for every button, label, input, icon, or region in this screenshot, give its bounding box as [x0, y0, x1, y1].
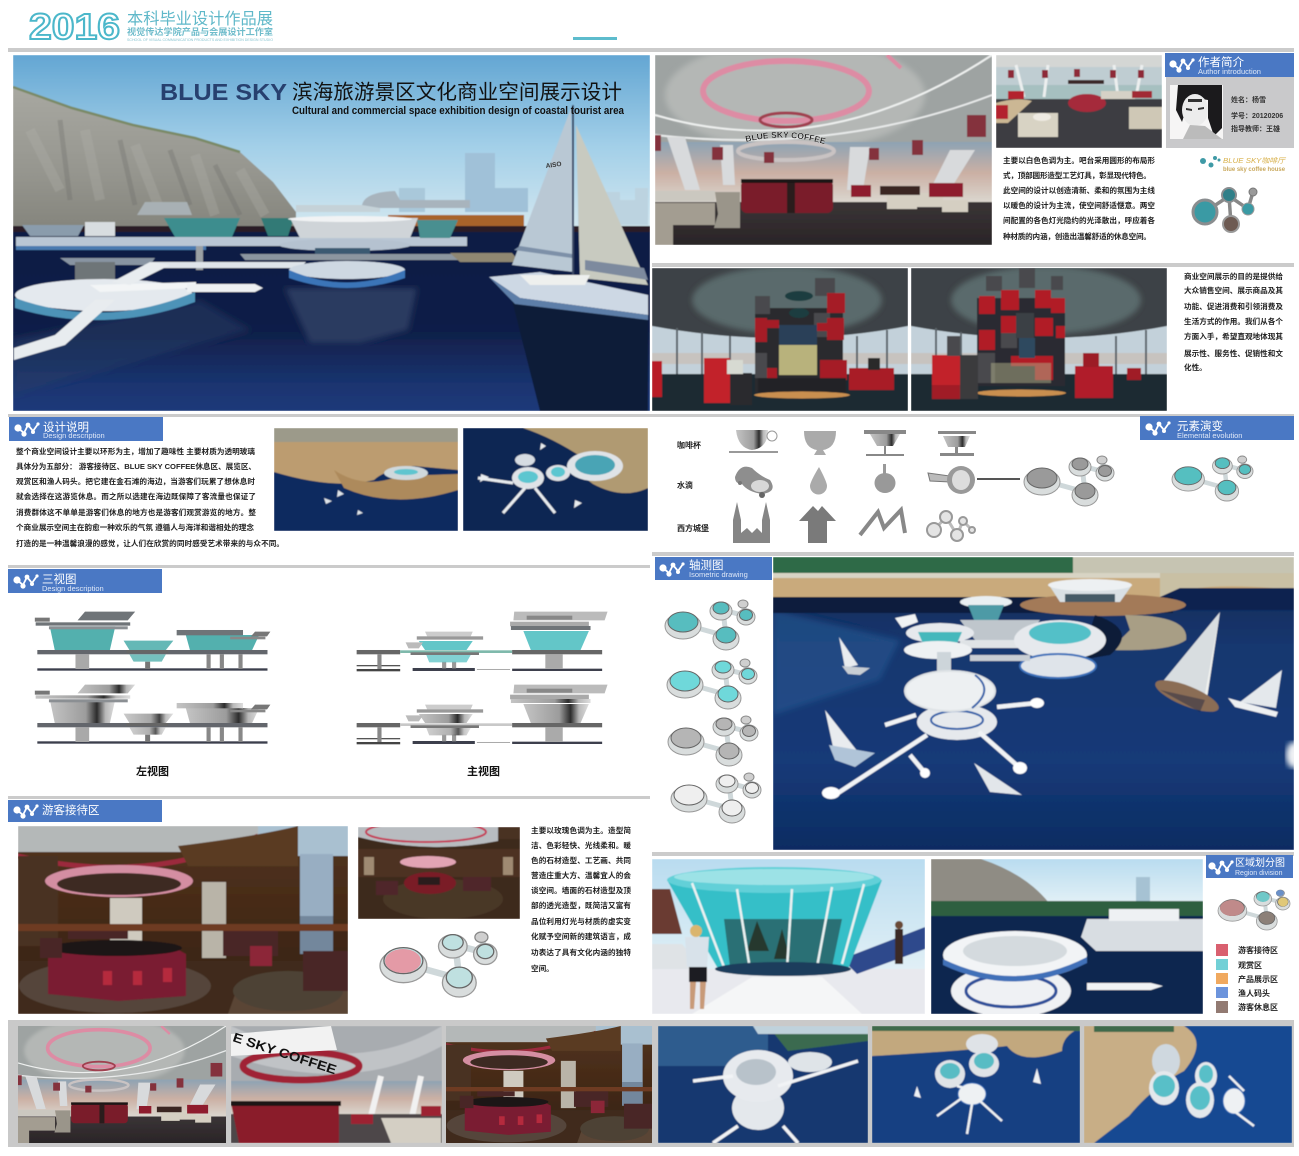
text: reception description: 部的透光造型，既简洁又富有	[531, 900, 631, 910]
icon: castle	[733, 502, 770, 543]
render: cafe bar close-up	[231, 1026, 442, 1143]
main title: BLUE SKY	[160, 79, 287, 105]
heading: elemental evolution: 元素演变	[1177, 419, 1223, 433]
panel: exhibition render left	[652, 268, 908, 411]
panel: region division	[1206, 855, 1293, 1013]
text: cafe description	[1003, 155, 1155, 241]
panel: region render dome	[652, 859, 925, 1014]
heading: elemental evolution: Elemental evolution	[1177, 431, 1242, 440]
icon: rings	[927, 511, 975, 541]
panel: author introduction: 学号：20120206	[1231, 111, 1283, 120]
heading: author introduction: 作者简介	[1198, 55, 1244, 69]
icon: zigzag	[860, 510, 905, 535]
render: aerial one	[658, 1026, 868, 1143]
text: reception description: 化赋予空间新的建筑语言，成	[531, 931, 631, 941]
heading: visitor reception	[8, 800, 162, 822]
model: grey evolution	[1024, 456, 1114, 506]
text: design description: 整个商业空间设计主要以环形为主，增加了趣味性 主要材质为透明玻璃	[16, 446, 255, 456]
text: reception description: 功表达了具有文化内涵的独特	[531, 947, 631, 957]
cafe sign: BLUE SKY COFFEE	[745, 132, 826, 144]
author details: 姓名：杨雪	[1231, 95, 1266, 104]
model: coloured evolution	[1172, 456, 1253, 501]
panel: isometric drawing	[655, 557, 1299, 850]
heading: author introduction	[1165, 53, 1294, 77]
panel: region render bay	[931, 859, 1203, 1014]
panel: author introduction	[1165, 53, 1294, 148]
heading: three views	[8, 569, 162, 593]
panel: author introduction: 指导教师：王雄	[1231, 124, 1280, 133]
text: design description: 具体分为五部分： 游客接待区、BLUE SKY COFFEE休息区、展览区、	[16, 461, 256, 471]
text: reception description: 色的石材造型、工艺画、共同	[531, 855, 631, 865]
text: cafe description: 种材质的内涵，创造出温馨舒适的休息空间。	[1003, 231, 1151, 241]
text: reception description: 谈空间。墙面的石材造型及顶	[531, 885, 631, 895]
text: reception description: 品位利用灯光与材质的虚实变	[531, 916, 631, 926]
model: isometric grey	[668, 716, 758, 766]
heading: region division	[1206, 855, 1293, 878]
render: cafe wide	[18, 1026, 226, 1143]
background frame rules	[8, 48, 1294, 856]
icon: stacked section	[938, 431, 976, 456]
panel: cafe overview render	[996, 55, 1162, 148]
panel: beach site render	[274, 428, 458, 531]
text: design description: 观赏区和渔人码头。把它建在金石滩的海边，当游客们玩累了想休息时	[16, 476, 255, 486]
panel: element evolution	[677, 416, 1294, 543]
drawing: front elevation grey	[357, 685, 608, 744]
heading: isometric drawing: 轴测图	[689, 558, 724, 572]
render: reception interior	[18, 826, 348, 1014]
school name in English: SCHOOL OF VISUAL COMMUNICATION PRODUCTS AND EXHIBITION DESIGN STUDIO	[127, 38, 274, 42]
text: exhibition purpose: 大众销售空间、展示商品及其	[1184, 285, 1283, 295]
drawing: left elevation grey	[35, 685, 270, 744]
text: design description	[16, 446, 284, 548]
text: exhibition purpose: 生活方式的作用。我们从各个	[1184, 316, 1283, 326]
text: cafe description: 间配置的各色灯光隐约的光泽散出，呼应着各	[1003, 215, 1155, 225]
heading: elemental evolution	[1140, 416, 1294, 440]
text: cafe description: 主要以白色色调为主。吧台采用圆形的布局形	[1003, 155, 1155, 165]
row label water drop: 水滴	[677, 480, 693, 490]
school name: 视觉传达学院产品与会展设计工作室	[127, 26, 273, 37]
text: reception description: 主要以玫瑰色调为主。造型简	[531, 825, 631, 835]
text: design description: 打造的是一种温馨浪漫的感觉，让人们在欣赏的同时感受艺术带来的与众不同。	[16, 538, 284, 548]
panel: gallery strip	[8, 1017, 1294, 1147]
accent dash	[573, 37, 617, 40]
text: reception description: 空间。	[531, 963, 554, 973]
panel: hero render	[13, 55, 650, 411]
heading: author introduction: Author introduction	[1198, 67, 1261, 76]
panel: exhibition render right	[911, 268, 1167, 411]
text: exhibition purpose: 方面入手，希望直观地体现其	[1184, 331, 1283, 341]
text: cafe description: 式，顶部圆形造型工艺灯具，彰显现代特色。	[1003, 170, 1151, 180]
model: reception	[380, 932, 497, 997]
legend: 渔人码头	[1238, 988, 1270, 998]
legend: 产品展示区	[1238, 974, 1278, 984]
render: aerial two	[872, 1026, 1080, 1143]
sign text: E SKY COFFEE	[231, 1030, 339, 1077]
exhibition header	[29, 6, 274, 47]
heading: isometric drawing: Isometric drawing	[689, 570, 748, 579]
drawing: front elevation colour	[357, 612, 608, 671]
model: isometric colour	[665, 600, 755, 650]
text: design description: 就会选择在这游览休息。而之所以选建在海边既保障了客流量也保证了	[16, 491, 256, 501]
row labels: 咖啡杯	[677, 440, 701, 450]
model: isometric line	[671, 773, 761, 823]
row label castle: 西方城堡	[677, 523, 709, 533]
heading: three views: Design description	[42, 584, 104, 593]
render: reception overview	[358, 827, 520, 919]
icon: molecule logo	[1193, 188, 1257, 232]
heading: region division: 区域划分图	[1235, 856, 1285, 869]
heading: design description: 设计说明	[43, 420, 89, 434]
text: reception description: 营造庄重大方、温馨宜人的会	[531, 870, 631, 880]
panel: visitor reception	[8, 800, 631, 1014]
exhibition title: 本科毕业设计作品展	[127, 10, 273, 28]
icon: arrow	[799, 506, 836, 543]
model: region zones	[1218, 890, 1290, 930]
text: exhibition purpose: 化性。	[1184, 362, 1207, 372]
heading: three views: 三视图	[42, 572, 76, 586]
drawing: left elevation colour	[35, 612, 270, 671]
icon: spoon ring	[928, 466, 975, 494]
heading: isometric drawing	[655, 557, 772, 580]
sail brand: AISO	[545, 161, 562, 170]
render: aerial three	[1084, 1026, 1292, 1143]
icon: coffee cup photo	[729, 430, 778, 453]
text: design description: 个商业展示空间主在韵愈一种欢乐的气氛 遵循人与海洋和谐相处的理念	[16, 522, 254, 532]
cafe logo: blue sky coffee house	[1223, 166, 1286, 173]
icon: water blob	[735, 467, 773, 498]
main subtitle: Cultural and commercial space exhibition design of coastal tourist area	[292, 105, 625, 117]
legend	[1216, 944, 1278, 1013]
heading: visitor reception: 游客接待区	[42, 803, 100, 817]
arrow line	[977, 478, 1020, 480]
text: exhibition purpose: 展示性、服务性、促销性和文	[1184, 348, 1283, 358]
text: cafe description: 此空间的设计以创造清新、柔和的氛围为主线	[1003, 185, 1155, 195]
text: cafe description: 以暖色的设计为主流，使空间舒适惬意。两空	[1003, 200, 1155, 210]
panel: cafe interior render	[655, 55, 992, 245]
text: reception description: 洁、色彩轻快、光线柔和。暖	[531, 840, 631, 850]
panel: aerial site render	[463, 428, 648, 531]
icon: drop	[810, 467, 827, 494]
author portrait	[1170, 85, 1223, 139]
panel: three views	[8, 569, 608, 778]
icon: platter section	[864, 430, 906, 456]
main title Chinese: 滨海旅游景区文化商业空间展示设计	[292, 81, 622, 104]
heading: design description	[9, 417, 163, 441]
heading: region division: Region division	[1235, 870, 1283, 877]
icon: bowl	[804, 431, 836, 455]
label: front view: 主视图	[467, 764, 500, 778]
gallery background	[8, 1020, 1294, 1147]
render: reception wide	[446, 1026, 652, 1143]
heading: design description: Design description	[43, 431, 105, 440]
legend: 游客休息区	[1238, 1002, 1278, 1012]
text: design description: 消费群体这不单单是游客们休息的地方也是游客们观赏游览的地方。整	[16, 507, 256, 517]
render: isometric overview	[773, 557, 1294, 850]
model: isometric teal	[667, 659, 757, 709]
text: exhibition purpose: 功能、促进消费和引领消费及	[1184, 301, 1283, 311]
legend: 观赏区	[1238, 960, 1262, 970]
cafe logo: BLUE SKY咖啡厅	[1223, 157, 1287, 165]
year mark 2016: 2016	[29, 6, 120, 47]
label: left view: 左视图	[136, 764, 169, 778]
text: exhibition purpose: 商业空间展示的目的是提供给	[1184, 271, 1283, 281]
cafe logo	[1200, 156, 1287, 173]
text: exhibition purpose	[1184, 271, 1283, 372]
legend: 游客接待区	[1238, 945, 1278, 955]
text: reception description	[531, 825, 631, 973]
author panel background	[1166, 77, 1294, 148]
icon: round drop	[874, 464, 896, 493]
